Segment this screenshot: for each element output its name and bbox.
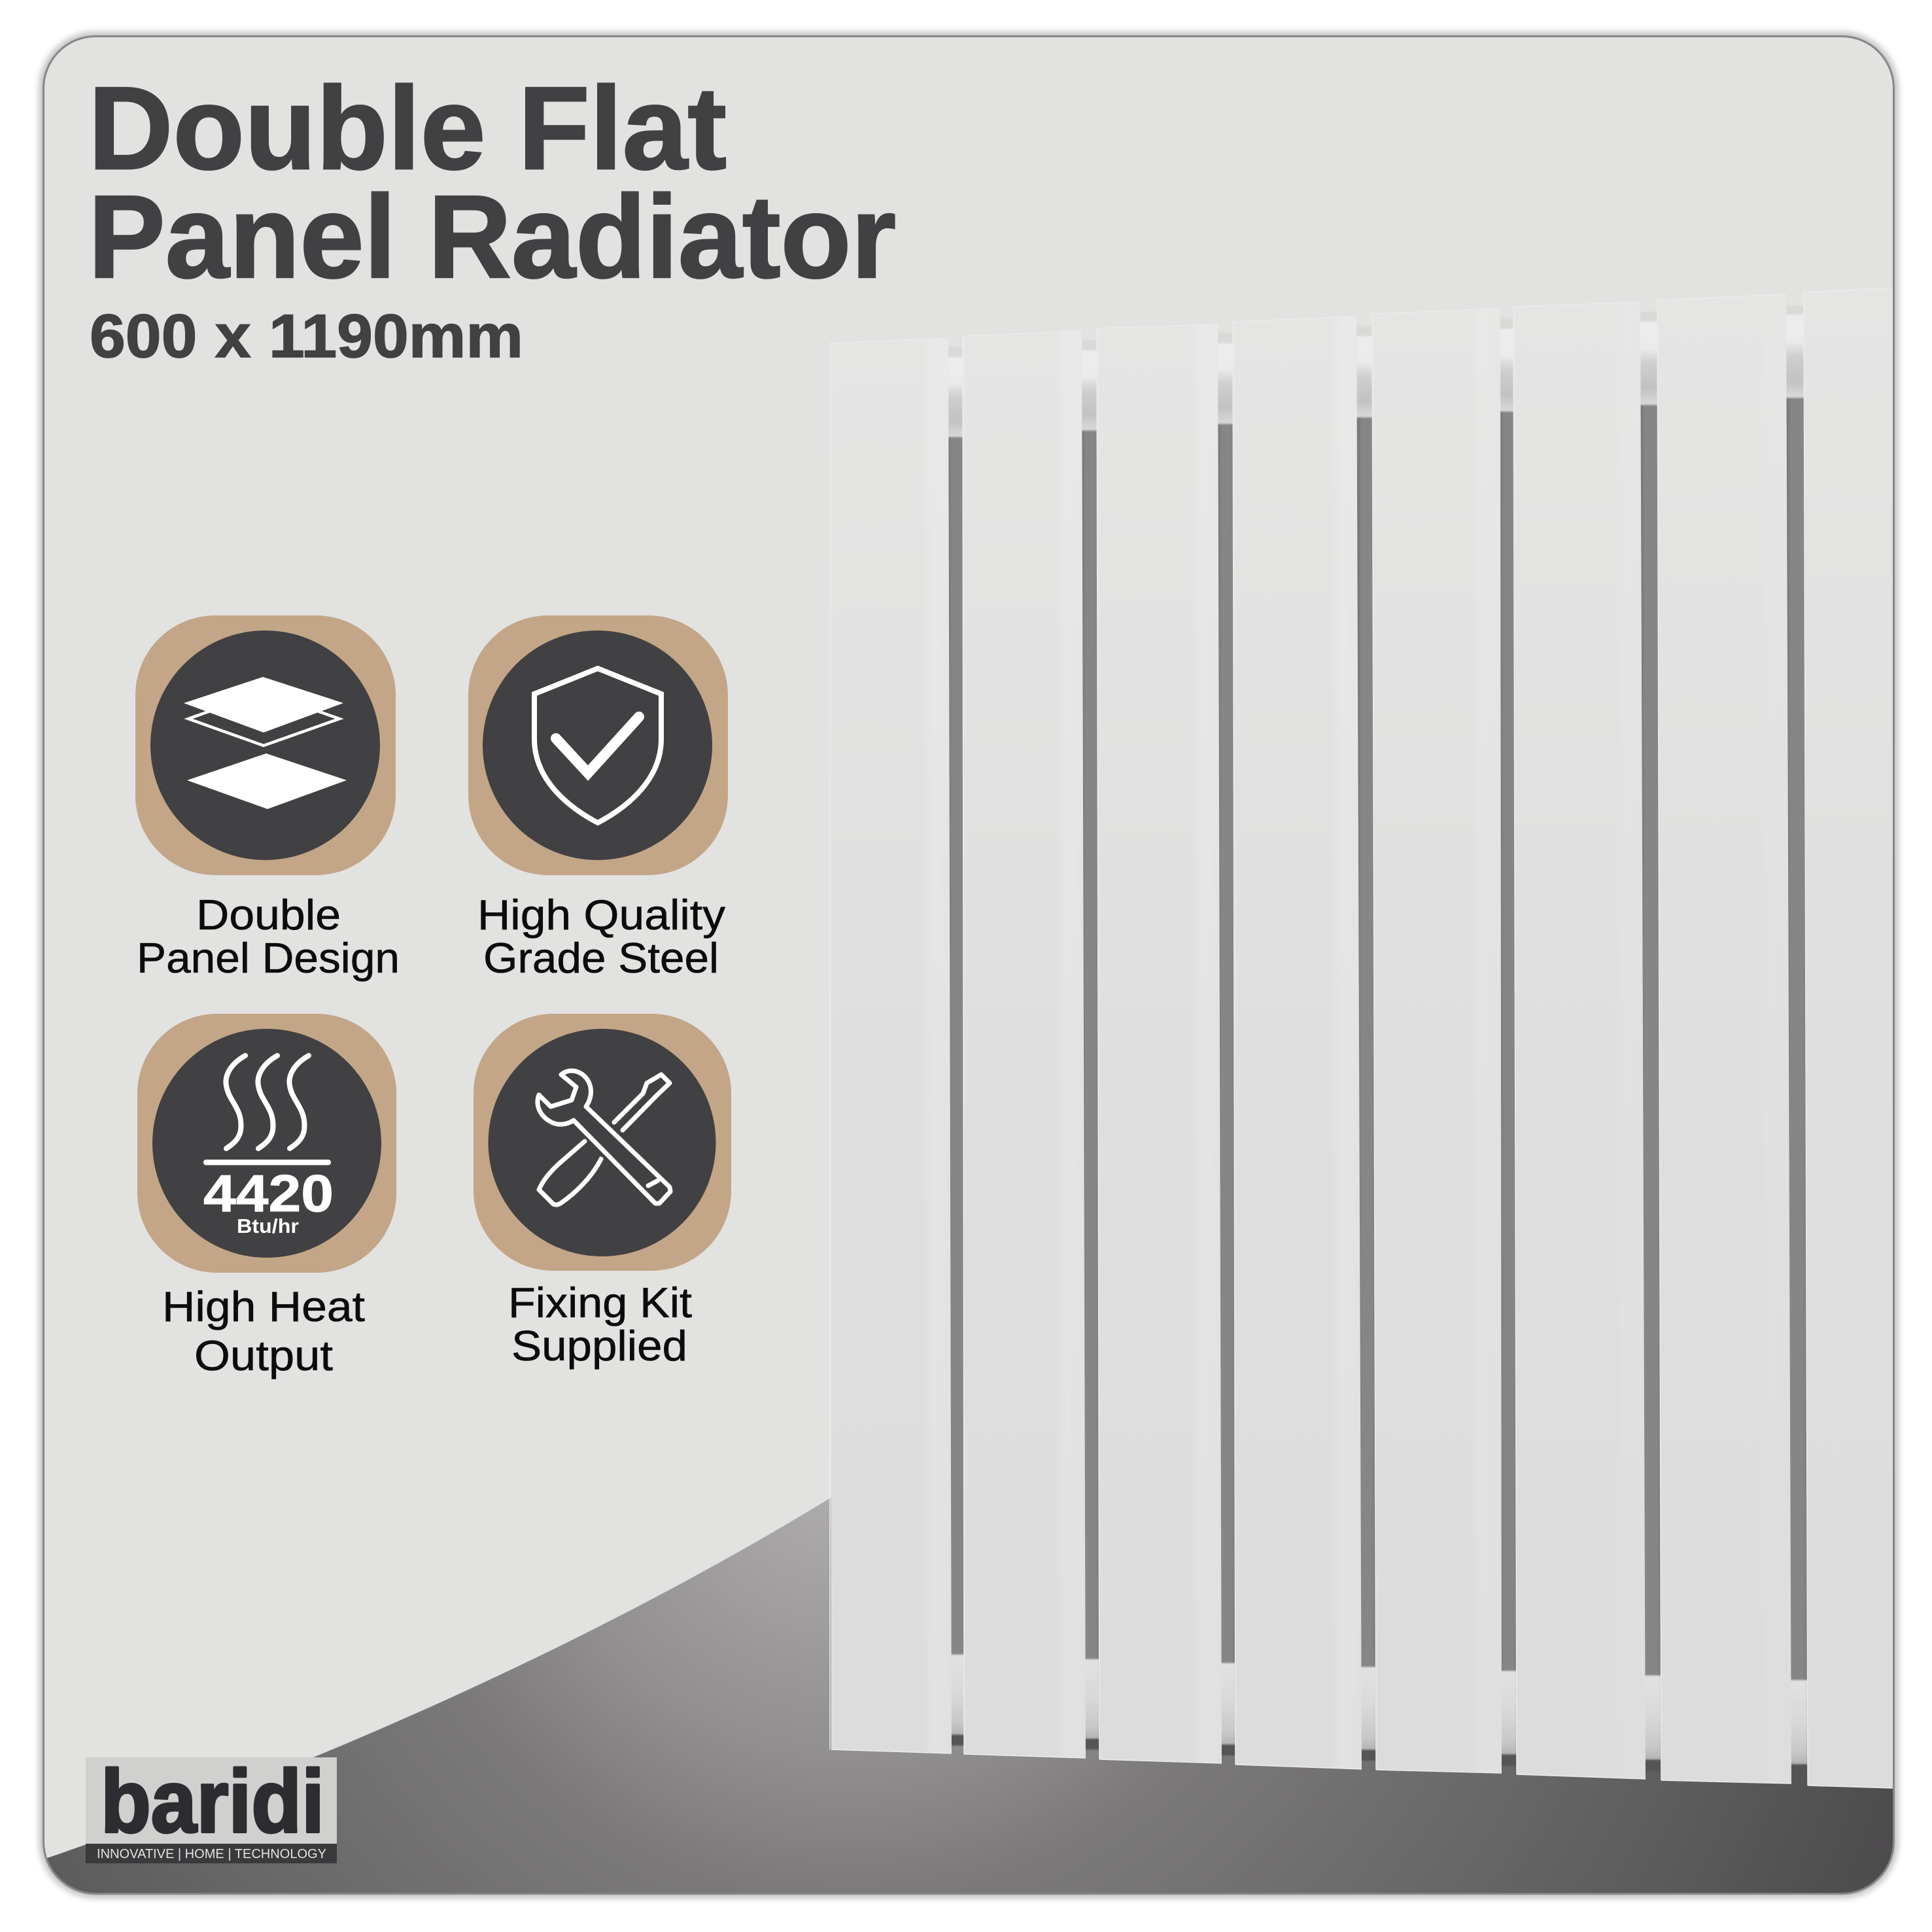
- output unit: Btu/hr: [237, 1215, 299, 1237]
- subtitle: dimensions: 600 x 1190mm: [90, 302, 523, 370]
- radiator panel 5: [1372, 309, 1502, 1773]
- dark circle: [152, 1029, 381, 1258]
- badge: high quality steel: [468, 615, 728, 875]
- radiator panel 7: [1657, 294, 1791, 1784]
- logo tagline: INNOVATIVE | HOME | TECHNOLOGY: [97, 1847, 326, 1861]
- title: Double Flat: [88, 63, 727, 194]
- label: high quality grade steel: [477, 891, 726, 982]
- radiator panel 8: [1804, 288, 1893, 1788]
- radiator panel 4: [1233, 317, 1362, 1769]
- label: high quality grade steel: Grade Steel: [483, 934, 719, 982]
- label: high heat output: [162, 1283, 365, 1379]
- label: high quality grade steel: High Quality: [477, 891, 726, 939]
- label: fixing kit supplied: [508, 1279, 692, 1370]
- output value: 4420: [203, 1164, 334, 1222]
- logo tagline band: [86, 1844, 337, 1863]
- radiator: [830, 288, 1893, 1788]
- badge: high heat output: [137, 1014, 396, 1273]
- radiator gaps and rails: [947, 305, 1808, 1774]
- label: double panel design: Double: [196, 891, 341, 939]
- badge: double panel design: [135, 615, 396, 875]
- tan rounded square: [135, 615, 396, 875]
- dark circle: [150, 630, 380, 860]
- logo wordmark: baridi: [101, 1751, 324, 1851]
- tan rounded square: [474, 1014, 731, 1271]
- dark circle: [488, 1029, 716, 1256]
- radiator panel 1: [830, 338, 952, 1753]
- floor: grey curved wedge: [39, 1497, 1897, 1897]
- label: double panel design: Panel Design: [137, 934, 400, 982]
- tan rounded square: [468, 615, 728, 875]
- radiator panel 3: [1097, 324, 1222, 1763]
- icon: shield with check: [534, 668, 661, 823]
- badge: fixing kit: [474, 1014, 731, 1271]
- label: high heat output: Output: [194, 1332, 333, 1379]
- label: double panel design: [137, 891, 400, 982]
- title: [88, 63, 896, 303]
- radiator panel 6: [1513, 302, 1646, 1779]
- logo background: [86, 1757, 337, 1844]
- label: fixing kit supplied: Fixing Kit: [508, 1279, 692, 1326]
- brand logo: [86, 1751, 337, 1863]
- title: Panel Radiator: [88, 171, 896, 303]
- dark circle: [483, 630, 712, 860]
- icon: heat waves: [203, 1056, 331, 1165]
- icon: stacked panels: [184, 677, 347, 809]
- icon: crossed wrench and screwdriver: [538, 1071, 670, 1205]
- tan rounded square: [137, 1014, 396, 1273]
- label: high heat output: High Heat: [162, 1283, 365, 1330]
- label: fixing kit supplied: Supplied: [511, 1322, 687, 1370]
- radiator panel 2: [963, 331, 1086, 1758]
